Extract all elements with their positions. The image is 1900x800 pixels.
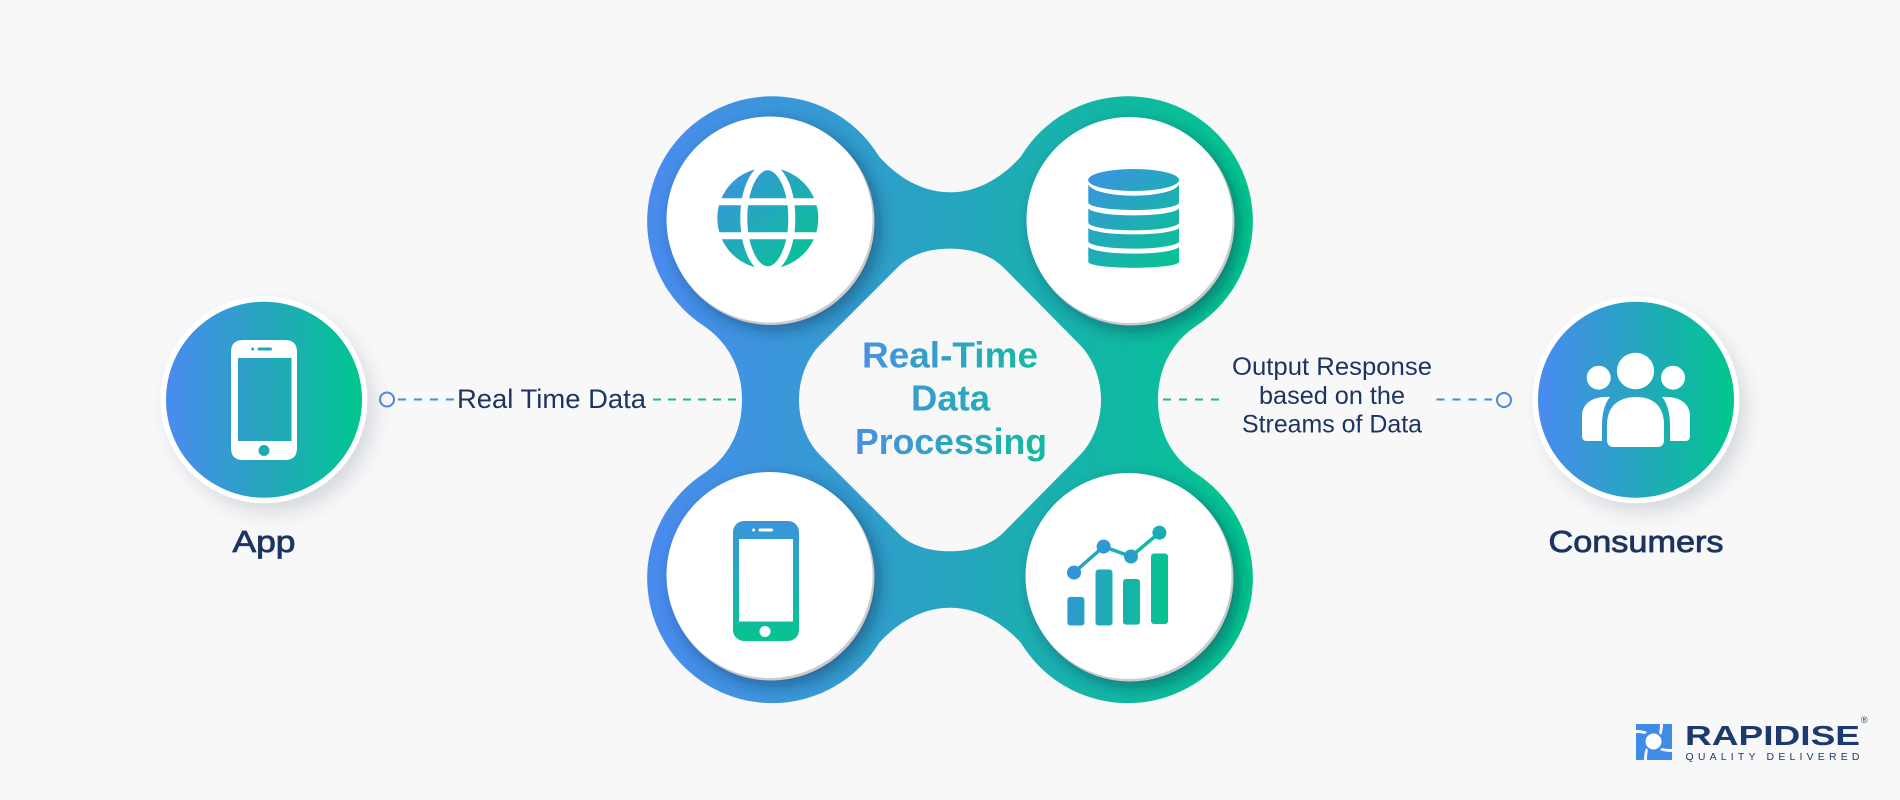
icon: database — [1088, 169, 1179, 268]
logo: rapidise — [1636, 715, 1868, 763]
icon: phone — [733, 521, 799, 641]
dashed line green — [1163, 398, 1219, 400]
logo mark — [1636, 724, 1672, 760]
title: Real-Time — [862, 334, 1038, 376]
icon: app phone — [231, 340, 297, 460]
database node — [1026, 117, 1234, 326]
dashed line green — [653, 398, 741, 400]
panel: app source — [160, 296, 374, 559]
label: output response: based on the — [1259, 382, 1405, 410]
label: real time data: Real Time Data — [457, 384, 647, 414]
dashed line blue — [398, 398, 454, 400]
label: output response: Output Response — [1232, 353, 1432, 381]
connected four-circle shape — [647, 96, 1253, 703]
title — [855, 334, 1047, 462]
panel: real-time data processing hub — [647, 96, 1253, 703]
icon: chart — [1067, 526, 1168, 626]
analytics node — [1026, 473, 1234, 682]
connector: output response — [1163, 353, 1511, 438]
icon: people group — [1582, 353, 1690, 447]
label: consumers: Consumers — [1548, 524, 1724, 559]
node ring — [1497, 393, 1511, 407]
globe node — [666, 116, 874, 325]
mobile node — [666, 472, 874, 680]
logo wordmark: RAPIDISE — [1685, 720, 1860, 751]
dashed line blue — [1436, 398, 1492, 400]
label: output response — [1232, 353, 1432, 438]
node ring — [380, 392, 394, 406]
title: Data — [911, 378, 991, 418]
app circle — [160, 296, 374, 512]
title: Processing — [855, 421, 1047, 462]
icon: globe — [712, 167, 824, 270]
logo tagline: QUALITY DELIVERED — [1686, 751, 1860, 763]
connector: real time data — [380, 384, 741, 414]
consumers circle — [1532, 296, 1746, 512]
label: app: App — [232, 524, 296, 559]
circle shadows on the shape — [673, 123, 1239, 686]
panel: consumers — [1532, 296, 1746, 559]
label: output response: Streams of Data — [1242, 410, 1422, 438]
logo registered mark: ® — [1861, 715, 1868, 725]
